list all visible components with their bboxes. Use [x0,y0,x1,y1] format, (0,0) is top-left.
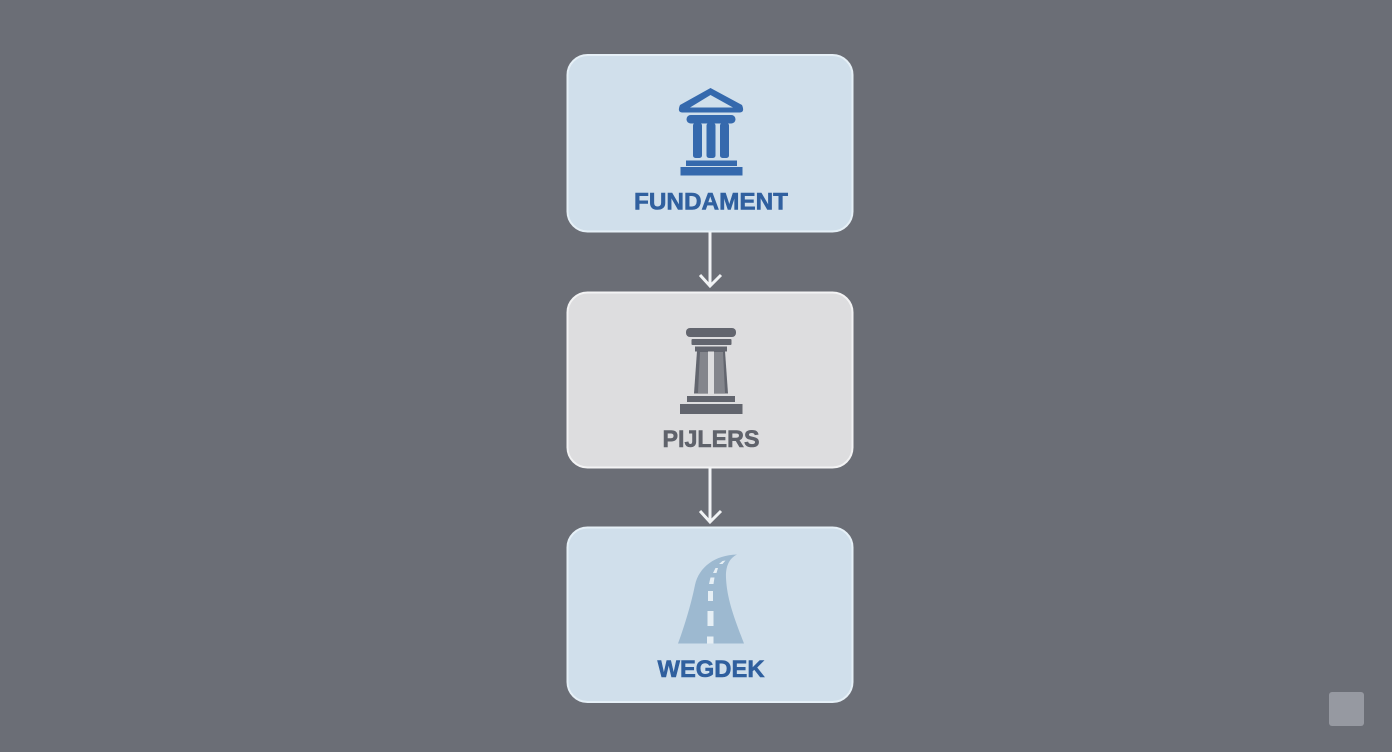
panel: fundament [568,55,852,232]
icon: road [678,554,744,644]
arrow: pijlers to wegdek [700,468,721,522]
icon: pillar [680,328,742,414]
icon: temple [679,88,743,176]
label: fundament: FUNDAMENT [634,188,788,216]
label: wegdek: WEGDEK [658,656,765,683]
arrow: fundament to pijlers [700,232,721,286]
label: pijlers: PIJLERS [662,426,760,453]
watermark square [1329,692,1364,726]
panel: wegdek [568,528,852,702]
panel: pijlers [568,292,852,468]
